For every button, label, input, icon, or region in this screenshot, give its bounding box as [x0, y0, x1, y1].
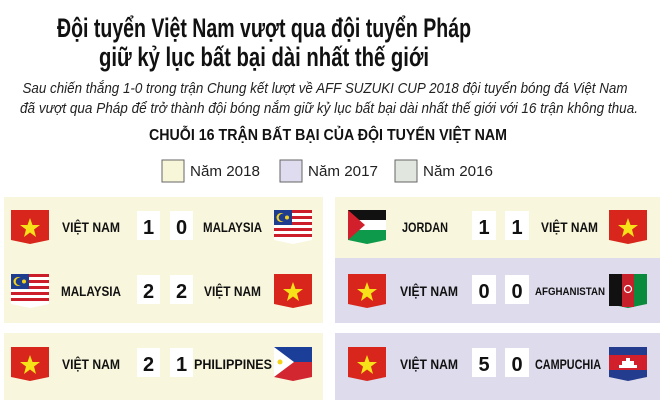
match: Việt Nam 0-0 Afghanistan: AFGHANISTAN	[535, 286, 605, 298]
match: Malaysia 2-2 Việt Nam	[11, 274, 312, 308]
match: Malaysia 2-2 Việt Nam: 2	[143, 281, 154, 303]
match: Việt Nam 0-0 Afghanistan: 0	[478, 281, 490, 303]
match: Jordan 1-1 Việt Nam: 1	[511, 217, 523, 239]
match: Việt Nam 1-0 Malaysia: MALAYSIA	[203, 220, 262, 235]
match: Việt Nam 1-0 Malaysia	[11, 210, 312, 244]
match: Malaysia 2-2 Việt Nam: VIỆT NAM	[204, 284, 261, 299]
match rows	[11, 210, 647, 381]
legend: Năm 2016	[423, 163, 493, 180]
match: Việt Nam 2-1 Philippines: PHILIPPINES	[194, 357, 272, 372]
title: giữ kỷ lục bất bại dài nhất thế giới	[99, 42, 429, 72]
match: Việt Nam 5-0 Campuchia: 5	[478, 354, 490, 376]
match: Việt Nam 5-0 Campuchia: CAMPUCHIA	[535, 357, 601, 372]
match: Việt Nam 1-0 Malaysia: 0	[176, 217, 187, 239]
match: Việt Nam 0-0 Afghanistan	[348, 274, 647, 308]
match: Việt Nam 1-0 Malaysia: VIỆT NAM	[62, 220, 120, 235]
title	[57, 13, 471, 72]
match: Malaysia 2-2 Việt Nam: 2	[176, 281, 187, 303]
match: Jordan 1-1 Việt Nam: JORDAN	[402, 220, 448, 235]
match: Việt Nam 2-1 Philippines: 1	[176, 354, 187, 376]
subtitle	[20, 80, 638, 117]
title: Đội tuyển Việt Nam vượt qua đội tuyển Pháp	[57, 13, 471, 43]
match: Việt Nam 5-0 Campuchia: 0	[511, 354, 523, 376]
match: Việt Nam 2-1 Philippines	[11, 347, 312, 381]
match: Việt Nam 0-0 Afghanistan: VIỆT NAM	[400, 284, 458, 299]
match: Việt Nam 5-0 Campuchia: VIỆT NAM	[400, 357, 458, 372]
legend	[162, 160, 493, 182]
legend: Năm 2017	[308, 163, 378, 180]
match: Việt Nam 2-1 Philippines: VIỆT NAM	[62, 357, 120, 372]
match: Việt Nam 5-0 Campuchia	[348, 347, 647, 381]
match: Jordan 1-1 Việt Nam: 1	[478, 217, 490, 239]
section heading: CHUỖI 16 TRẬN BẤT BẠI CỦA ĐỘI TUYỂN VIỆT NAM	[149, 126, 507, 144]
match: Việt Nam 2-1 Philippines: 2	[143, 354, 154, 376]
match: Malaysia 2-2 Việt Nam: MALAYSIA	[61, 284, 121, 299]
match: Jordan 1-1 Việt Nam: VIỆT NAM	[541, 220, 598, 235]
match: Jordan 1-1 Việt Nam	[348, 210, 647, 244]
match: Việt Nam 0-0 Afghanistan: 0	[511, 281, 523, 303]
match: Việt Nam 1-0 Malaysia: 1	[143, 217, 154, 239]
legend: Năm 2018	[190, 163, 260, 180]
panel backgrounds	[4, 197, 660, 400]
